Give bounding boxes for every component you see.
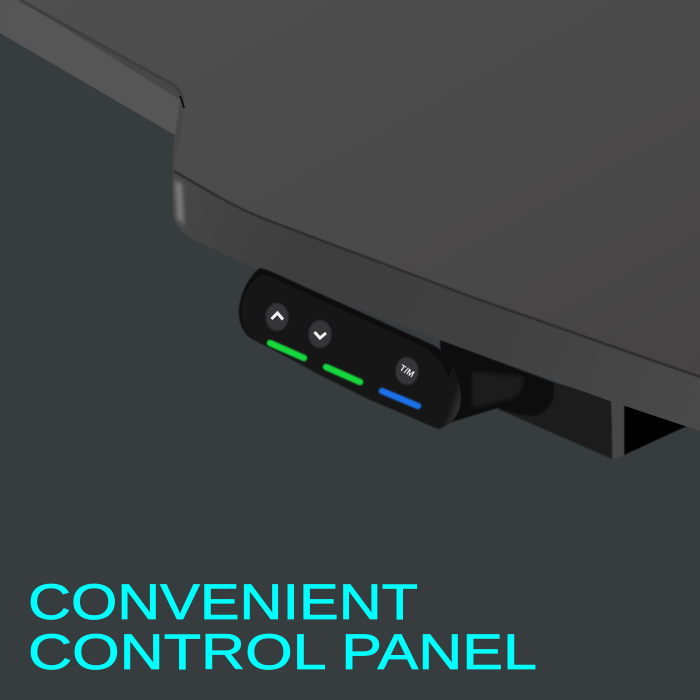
desk corner highlight	[175, 180, 184, 226]
desk top edge groove	[20, 0, 183, 100]
connector body shading	[472, 372, 523, 408]
desk corner shadow	[180, 96, 184, 108]
bracket opening	[624, 405, 687, 455]
green indicator left	[270, 343, 304, 358]
bracket post	[611, 399, 624, 459]
blue indicator	[382, 391, 418, 406]
green indicator middle	[326, 367, 360, 382]
down button	[308, 320, 332, 348]
desk top surface	[20, 0, 700, 377]
up button	[266, 303, 288, 331]
heading line 2: CONTROL PANEL	[28, 624, 537, 680]
heading	[28, 574, 537, 680]
up chevron	[272, 313, 283, 320]
panel face	[241, 275, 452, 427]
memory button label: T/M	[398, 363, 416, 379]
cable connector	[440, 340, 554, 424]
control panel	[239, 268, 461, 429]
desk underside bracket	[498, 382, 687, 459]
down chevron	[314, 332, 326, 338]
desk front edge groove	[174, 171, 700, 377]
desk side face left section	[0, 0, 180, 135]
memory button	[396, 357, 418, 385]
desk side face	[0, 0, 700, 431]
heading line 1: CONVENIENT	[28, 574, 418, 630]
panel body	[239, 268, 461, 429]
